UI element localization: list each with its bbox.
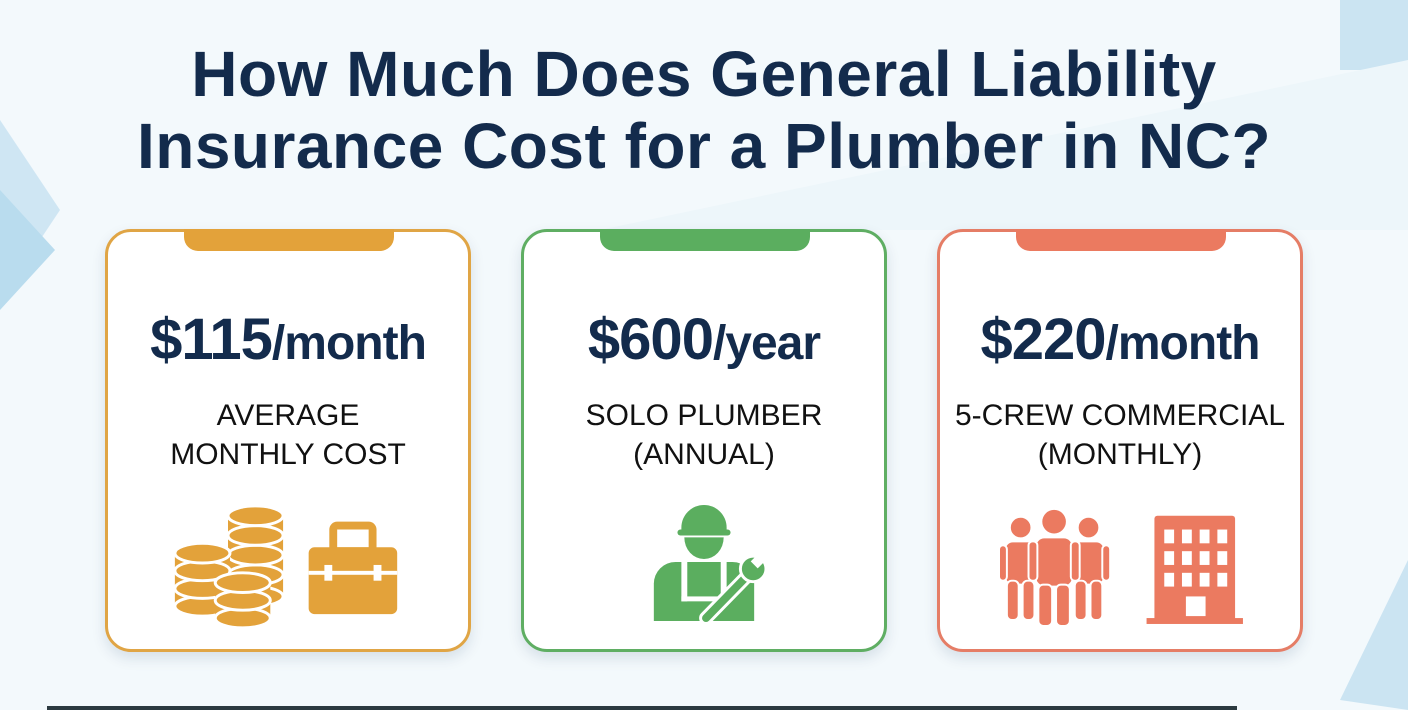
label: 5-crew commercial monthly: (MONTHLY) — [1038, 438, 1202, 471]
price: $600/year: $600/year — [588, 307, 820, 372]
label: 5-crew commercial monthly — [955, 399, 1285, 471]
icon: coins and toolbox — [174, 507, 398, 626]
label: average monthly cost: AVERAGE — [217, 399, 359, 432]
panel: solo plumber — [521, 229, 887, 652]
title: Insurance Cost for a Plumber in NC? — [137, 110, 1271, 182]
label: average monthly cost: MONTHLY COST — [170, 438, 406, 471]
title: How Much Does General Liability — [191, 38, 1217, 110]
label: solo plumber annual: SOLO PLUMBER — [586, 399, 822, 432]
label: solo plumber annual — [586, 399, 822, 471]
panel: average monthly cost — [105, 229, 471, 652]
icon: plumber with wrench — [654, 505, 764, 622]
price: $115/month: $115/month — [150, 307, 426, 372]
label: solo plumber annual: (ANNUAL) — [633, 438, 775, 471]
title — [137, 38, 1271, 182]
icon: crew and building — [1000, 510, 1243, 625]
label: average monthly cost — [170, 399, 406, 471]
label: 5-crew commercial monthly: 5-CREW COMMERCIAL — [955, 399, 1285, 432]
panel: 5-crew commercial — [937, 229, 1303, 652]
price: $220/month: $220/month — [980, 307, 1260, 372]
